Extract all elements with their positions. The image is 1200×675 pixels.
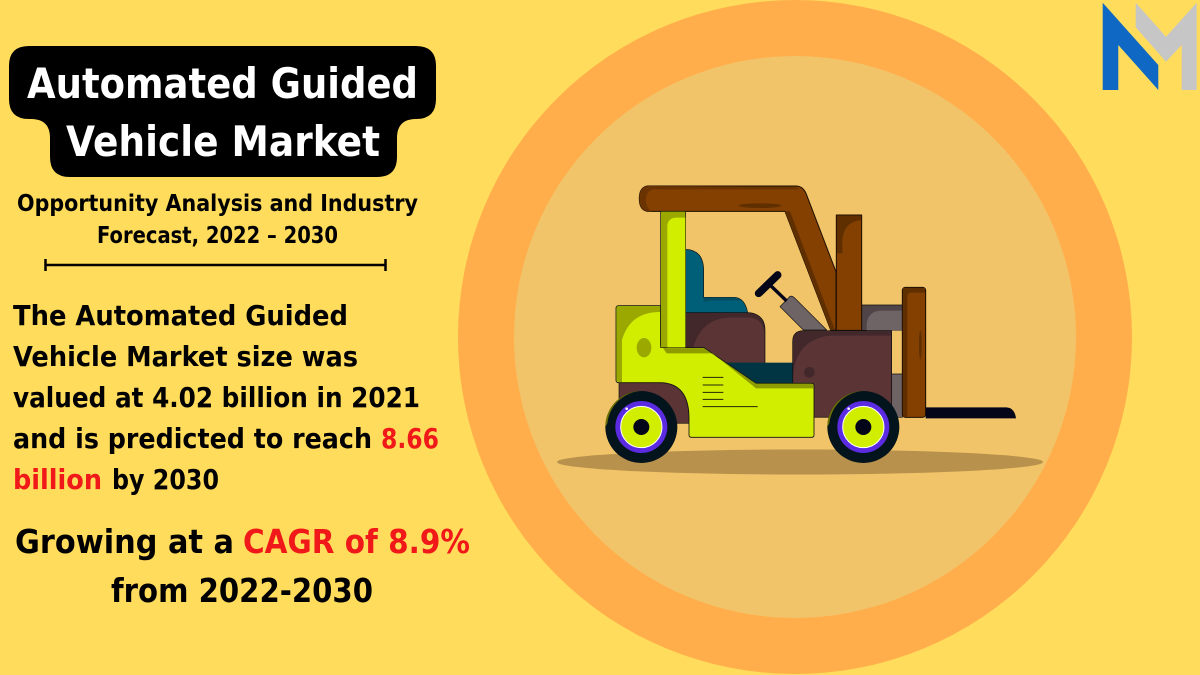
title text: Vehicle Market	[66, 117, 380, 166]
ground shadow	[557, 450, 1043, 474]
subtitle: Opportunity Analysis and Industry	[17, 191, 418, 217]
market size text: billion	[13, 463, 102, 496]
market size text	[13, 299, 439, 496]
CAGR text: Growing at a	[15, 522, 234, 561]
CAGR text: from 2022-2030	[111, 571, 373, 610]
illustration: forklift	[605, 186, 1016, 463]
logo	[1103, 3, 1197, 90]
CAGR text	[15, 522, 470, 610]
yellow body	[616, 306, 814, 437]
market size text: by 2030	[112, 463, 219, 496]
subtitle	[17, 191, 418, 249]
market size text: and is predicted to reach	[13, 422, 372, 455]
seat base	[686, 313, 765, 363]
rear brown body	[619, 382, 689, 423]
front housing	[793, 331, 892, 417]
subtitle: Forecast, 2022 – 2030	[97, 223, 338, 249]
market size text: Vehicle Market size was	[13, 340, 358, 373]
outer orange circle	[458, 0, 1132, 674]
seat back	[686, 249, 748, 313]
market size text: valued at 4.02 billion in 2021	[13, 381, 420, 414]
fork upright	[902, 287, 926, 417]
yellow pillar	[661, 211, 686, 348]
title text: Automated Guided	[27, 59, 418, 108]
vent lines	[703, 377, 758, 407]
roof and rear-sloping support	[639, 186, 836, 330]
market size text: 8.66	[381, 422, 439, 455]
grey mast bars	[862, 305, 902, 417]
floor panel	[725, 363, 793, 383]
steering column	[759, 275, 827, 330]
front wheel	[827, 391, 899, 463]
CAGR text: CAGR of 8.9%	[243, 522, 470, 561]
title badge	[9, 46, 436, 177]
fork blade	[926, 407, 1016, 418]
market size text: The Automated Guided	[13, 299, 348, 332]
title text	[27, 59, 418, 166]
inner circle	[514, 56, 1076, 618]
rear wheel	[605, 391, 677, 463]
divider rule	[45, 259, 386, 271]
mast	[836, 215, 862, 330]
